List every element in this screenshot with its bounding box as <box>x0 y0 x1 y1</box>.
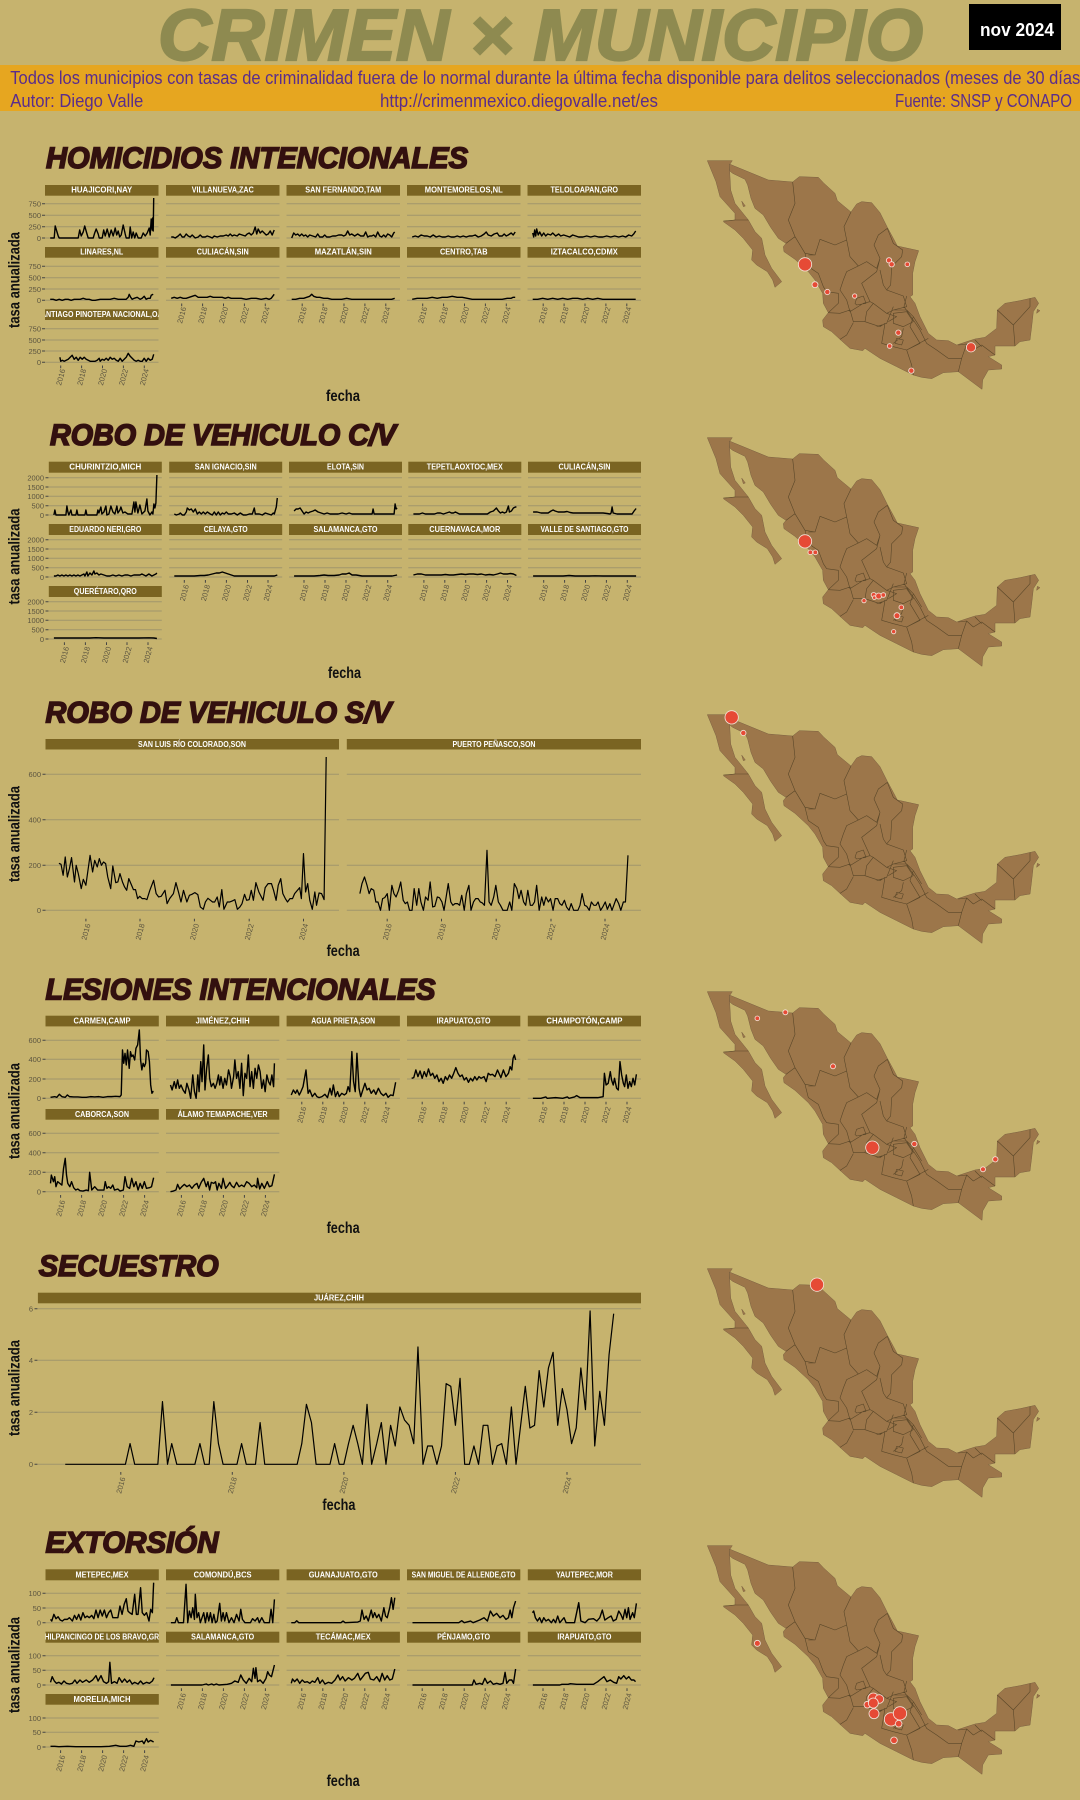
facet: Culiacán: 2018 <box>196 306 209 324</box>
facet: Comondú <box>166 1569 279 1623</box>
facet: Caborca: CABORCA,SON <box>75 1110 129 1119</box>
facet: Puerto Peñasco: PUERTO PEÑASCO,SON <box>452 740 536 749</box>
facet: Celaya <box>169 524 282 602</box>
facet: Mazatlán: 2022 <box>358 306 371 324</box>
facet: Salamanca: 2022 <box>360 584 373 602</box>
facet: San Luis Río Colorado: 200 <box>28 861 41 870</box>
subtitle band <box>0 65 1080 111</box>
facet: Valle de Santiago: 2016 <box>537 584 550 602</box>
facet: Santiago Pinotepa Nacional: 500 <box>28 336 41 345</box>
facet: Guanajuato <box>287 1569 400 1623</box>
facet: Eduardo Neri: EDUARDO NERI,GRO <box>69 525 141 534</box>
facet: Morelia: MORELIA,MICH <box>74 1695 131 1704</box>
facet: San Luis Río Colorado <box>28 739 339 941</box>
facet: Tepetlaoxtoc <box>408 462 521 515</box>
facet: Morelia: 2020 <box>96 1754 109 1773</box>
facet: Celaya: CELAYA,GTO <box>204 525 248 534</box>
facet: Irapuato <box>407 1016 520 1124</box>
x axis title: fecha <box>326 388 360 405</box>
facet: Tecámac: 2016 <box>295 1692 308 1711</box>
facet: Agua Prieta: AGUA PRIETA,SON <box>311 1016 375 1026</box>
facet: Santiago Pinotepa Nacional: 0 <box>37 358 41 367</box>
facet: Agua Prieta: 2020 <box>337 1106 350 1124</box>
facet: Teloloapan <box>528 185 641 238</box>
facet: San Luis Río Colorado: SAN LUIS RÍO COLORADO,SON <box>138 740 246 749</box>
facet: Cuernavaca: CUERNAVACA,MOR <box>429 525 501 534</box>
facet: San Luis Río Colorado: 2016 <box>79 923 92 941</box>
facet: Eduardo Neri: 0 <box>40 573 44 582</box>
facet: San Fernando <box>286 185 400 238</box>
facet: Irapuato: 2024 <box>500 1106 513 1124</box>
facet: Champotón: 2022 <box>600 1106 613 1124</box>
facet: Villanueva <box>166 185 280 238</box>
facet: San Luis Río Colorado: 2018 <box>134 923 147 941</box>
x axis title: fecha <box>327 943 360 960</box>
y axis title: tasa anualizada <box>6 1063 24 1159</box>
facet: Santiago Pinotepa Nacional: 2018 <box>75 368 88 386</box>
facet: Álamo Temapache <box>166 1109 279 1218</box>
x axis title: fecha <box>322 1497 355 1514</box>
facet: Salamanca: 2018 <box>196 1692 209 1711</box>
facet: Iztacalco: 2020 <box>579 306 592 324</box>
facet: Santiago Pinotepa Nacional: 2022 <box>117 368 130 386</box>
date badge: nov 2024 <box>980 20 1054 40</box>
facet: Irapuato: 2024 <box>621 1692 634 1711</box>
facet: Morelia: 100 <box>28 1714 41 1723</box>
facet: Puerto Peñasco: 2024 <box>599 923 612 941</box>
facet: Álamo Temapache: 2022 <box>238 1199 251 1218</box>
facet: Salamanca: 2024 <box>259 1692 272 1711</box>
facet: Irapuato: 2022 <box>600 1692 613 1711</box>
facet: Tepetlaoxtoc: TEPETLAOXTOC,MEX <box>427 463 503 472</box>
facet: Valle de Santiago: VALLE DE SANTIAGO,GTO <box>540 525 628 534</box>
facet: Centro <box>407 247 520 324</box>
facet: Salamanca: 2020 <box>340 584 353 602</box>
facet: Irapuato: 2018 <box>558 1692 571 1711</box>
facet: Agua Prieta: 2024 <box>379 1106 392 1124</box>
heading: EXTORSIÓN <box>46 1526 220 1560</box>
facet: Carmen: 200 <box>28 1075 41 1084</box>
facet: Santiago Pinotepa Nacional: 2016 <box>54 368 67 386</box>
facet: Querétaro: 2016 <box>58 646 71 664</box>
facet: Carmen: 400 <box>28 1055 41 1064</box>
facet: Culiacán: 2022 <box>238 306 251 324</box>
facet: Pénjamo: 2024 <box>500 1692 513 1711</box>
facet: Villanueva: VILLANUEVA,ZAC <box>192 186 254 195</box>
facet: Churintzio: 500 <box>31 502 44 510</box>
facet: Carmen <box>28 1016 159 1103</box>
facet: Chilpancingo de los Bravo <box>28 1632 164 1690</box>
facet: San Luis Río Colorado: 2020 <box>188 923 201 941</box>
facet: Cuernavaca: 2016 <box>417 584 430 602</box>
facet: San Luis Río Colorado: 2022 <box>243 923 256 941</box>
facet: Carmen: CARMEN,CAMP <box>74 1016 131 1026</box>
facet: Salamanca: 2018 <box>319 584 332 602</box>
facet: Irapuato: 2022 <box>479 1106 492 1124</box>
facet: Linares: 750 <box>28 262 41 271</box>
facet: Culiacán: 2016 <box>175 306 188 324</box>
facet: Salamanca: 2016 <box>175 1692 188 1711</box>
facet: Tecámac: 2020 <box>337 1692 350 1711</box>
facet: Culiacán <box>528 462 641 515</box>
facet: Irapuato: 2020 <box>579 1692 592 1711</box>
facet: Santiago Pinotepa Nacional <box>28 309 168 386</box>
facet: Eduardo Neri: 2000 <box>27 536 44 544</box>
facet: Carmen: 0 <box>37 1094 41 1103</box>
heading: ROBO DE VEHICULO C/V <box>50 419 399 452</box>
facet: Juárez: 2020 <box>337 1476 350 1495</box>
facet: Caborca <box>28 1109 159 1218</box>
facet: Valle de Santiago <box>528 524 641 602</box>
facet: Yautepec <box>528 1569 641 1623</box>
facet: Cuernavaca <box>408 524 521 602</box>
facet: Querétaro: 0 <box>40 635 44 644</box>
facet: San Ignacio <box>169 462 282 515</box>
facet: Eduardo Neri: 500 <box>31 564 44 572</box>
facet: Centro: 2022 <box>479 306 492 324</box>
facet: Huajicori: 500 <box>28 211 41 220</box>
facet: Morelia <box>28 1694 159 1773</box>
facet: Puerto Peñasco: 2018 <box>435 923 448 941</box>
panel: homicidios intencionales <box>6 142 641 405</box>
facet: Elota <box>289 462 402 515</box>
facet: Querétaro: 500 <box>31 626 44 634</box>
panel: robo de vehiculo con violencia <box>6 419 641 682</box>
facet: Churintzio: 1500 <box>27 483 44 492</box>
facet: Querétaro: 1500 <box>27 607 44 616</box>
x axis title: fecha <box>328 665 361 682</box>
facet: Iztacalco: 2018 <box>558 306 571 324</box>
facet: Álamo Temapache: ÁLAMO TEMAPACHE,VER <box>178 1110 268 1119</box>
facet: Culiacán: 2020 <box>217 306 230 324</box>
facet: Morelia: 2016 <box>54 1754 67 1773</box>
facet: Juárez: 2024 <box>561 1476 574 1495</box>
heading: SECUESTRO <box>39 1250 219 1283</box>
facet: Montemorelos <box>407 185 520 238</box>
facet: Eduardo Neri: 1000 <box>27 554 44 563</box>
facet: Juárez: 4 <box>29 1356 33 1365</box>
facet: Metepec: 0 <box>37 1618 41 1628</box>
facet: Culiacán: CULIACÁN,SIN <box>558 463 611 472</box>
facet: Juárez: 2018 <box>226 1476 239 1495</box>
facet: Metepec: 100 <box>28 1589 41 1598</box>
facet: Champotón: 2016 <box>537 1106 550 1124</box>
facet: Celaya: 2020 <box>220 584 233 602</box>
facet: Iztacalco: 2024 <box>620 306 633 324</box>
facet: Agua Prieta <box>287 1016 400 1124</box>
facet: Salamanca: 2016 <box>298 584 311 602</box>
x axis title: fecha <box>327 1220 360 1237</box>
facet: Querétaro: 2020 <box>100 646 113 664</box>
facet: Puerto Peñasco: 2020 <box>490 923 503 941</box>
facet: Irapuato: 2016 <box>537 1692 550 1711</box>
map: lesiones <box>707 992 1040 1220</box>
facet: Chilpancingo de los Bravo: 100 <box>28 1652 41 1660</box>
facet: Salamanca: 2022 <box>238 1692 251 1711</box>
facet: Centro: 2018 <box>437 306 450 324</box>
facet: Mazatlán: 2024 <box>379 306 392 324</box>
panel: secuestro <box>6 1250 641 1514</box>
facet: Santiago Pinotepa Nacional: 2020 <box>96 368 109 386</box>
facet: Yautepec: YAUTEPEC,MOR <box>556 1570 613 1579</box>
panel: extorsión <box>6 1526 641 1790</box>
y axis title: tasa anualizada <box>6 508 24 604</box>
facet: Irapuato: IRAPUATO,GTO <box>557 1633 611 1642</box>
facet: Champotón: 2018 <box>558 1106 571 1124</box>
facet: Valle de Santiago: 2022 <box>600 584 613 602</box>
facet: Churintzio: 2000 <box>27 474 44 482</box>
facet: Juárez <box>29 1293 641 1495</box>
facet: Celaya: 2024 <box>262 584 275 602</box>
facet: Champotón <box>528 1016 641 1124</box>
subtitle band: http://crimenmexico.diegovalle.net/es <box>380 91 658 111</box>
facet: Mazatlán <box>286 247 400 324</box>
date badge <box>969 4 1061 50</box>
facet: Juárez: 2016 <box>114 1476 127 1495</box>
facet: Puerto Peñasco <box>347 739 641 941</box>
facet: Mazatlán: 2018 <box>317 306 330 324</box>
facet: Churintzio: 1000 <box>27 492 44 501</box>
facet: Morelia: 2022 <box>117 1754 130 1773</box>
facet: Irapuato: 2016 <box>416 1106 429 1124</box>
facet: Culiacán: CULIACÁN,SIN <box>197 248 249 257</box>
facet: Salamanca: 2024 <box>381 584 394 602</box>
facet: Elota: ELOTA,SIN <box>327 463 364 472</box>
facet: Caborca: 2020 <box>96 1199 109 1218</box>
facet: Guanajuato: GUANAJUATO,GTO <box>309 1570 378 1579</box>
facet: Iztacalco <box>528 247 641 324</box>
facet: Metepec: 50 <box>33 1604 41 1613</box>
facet: Montemorelos: MONTEMORELOS,NL <box>425 186 503 195</box>
facet: Puerto Peñasco: 2022 <box>545 923 558 941</box>
facet: Jiménez <box>166 1016 279 1098</box>
facet: Centro: 2024 <box>500 306 513 324</box>
facet: Caborca: 600 <box>28 1129 41 1138</box>
facet: Salamanca: SALAMANCA,GTO <box>314 525 378 534</box>
facet: Linares: 0 <box>37 296 41 305</box>
facet: Teloloapan: TELOLOAPAN,GRO <box>550 186 618 195</box>
facet: Comondú: COMONDÚ,BCS <box>194 1570 252 1579</box>
facet: Santiago Pinotepa Nacional: 2024 <box>138 368 151 386</box>
facet: Linares: 250 <box>28 285 41 294</box>
facet: Centro: CENTRO,TAB <box>440 248 488 257</box>
facet: Mazatlán: MAZATLÁN,SIN <box>315 248 372 257</box>
facet: Querétaro: 2018 <box>79 646 92 664</box>
facet: Celaya: 2018 <box>199 584 212 602</box>
facet: Tecámac: TECÁMAC,MEX <box>316 1633 371 1642</box>
facet: Agua Prieta: 2022 <box>358 1106 371 1124</box>
facet: San Luis Río Colorado: 400 <box>28 816 41 824</box>
facet: Santiago Pinotepa Nacional: SANTIAGO PINOTEPA NACIONAL,OAX <box>36 310 168 319</box>
map: extorsión <box>707 1546 1040 1774</box>
facet: San Miguel de Allende: SAN MIGUEL DE ALLENDE,GTO <box>412 1570 516 1579</box>
facet: San Luis Río Colorado: 2024 <box>297 923 310 941</box>
facet: San Luis Río Colorado: 600 <box>28 770 41 779</box>
facet: Puerto Peñasco: 2016 <box>381 923 394 941</box>
facet: Cuernavaca: 2022 <box>480 584 493 602</box>
facet: San Luis Río Colorado: 0 <box>37 906 41 915</box>
facet: Centro: 2020 <box>458 306 471 324</box>
map: robo de vehiculo con violencia <box>707 438 1040 666</box>
facet: Álamo Temapache: 2020 <box>217 1199 230 1218</box>
facet: Álamo Temapache: 2024 <box>259 1199 272 1218</box>
facet: Carmen: 600 <box>28 1036 41 1045</box>
facet: Pénjamo: 2016 <box>416 1692 429 1711</box>
facet: Churintzio: 0 <box>40 511 44 520</box>
facet: Salamanca: SALAMANCA,GTO <box>191 1633 254 1642</box>
facet: Huajicori: 0 <box>37 234 41 243</box>
facet: San Miguel de Allende <box>407 1569 520 1623</box>
facet: Centro: 2016 <box>416 306 429 324</box>
map: robo de vehiculo sin violencia <box>707 711 1040 943</box>
facet: Cuernavaca: 2018 <box>438 584 451 602</box>
facet: Morelia: 2024 <box>138 1754 151 1773</box>
facet: Valle de Santiago: 2024 <box>621 584 634 602</box>
facet: Iztacalco: 2016 <box>537 306 550 324</box>
facet: Caborca: 2016 <box>54 1199 67 1218</box>
facet: Champotón: CHAMPOTÓN,CAMP <box>546 1016 623 1026</box>
facet: Champotón: 2020 <box>579 1106 592 1124</box>
facet: Culiacán: 2024 <box>259 306 272 324</box>
facet: Mazatlán: 2020 <box>338 306 351 324</box>
facet: Mazatlán: 2016 <box>296 306 309 324</box>
facet: Querétaro: 1000 <box>27 616 44 625</box>
facet: Huajicori: 250 <box>28 222 41 232</box>
facet: Juárez: 6 <box>29 1304 33 1314</box>
facet: Querétaro: QUERÉTARO,QRO <box>74 587 137 596</box>
heading: LESIONES INTENCIONALES <box>46 973 436 1006</box>
facet: Pénjamo: PÉNJAMO,GTO <box>437 1633 490 1642</box>
map: homicidios <box>707 161 1040 389</box>
heading: HOMICIDIOS INTENCIONALES <box>46 142 468 175</box>
facet: Huajicori <box>28 185 158 243</box>
facet: Huajicori: HUAJICORI,NAY <box>71 186 133 195</box>
facet: Querétaro <box>27 586 162 664</box>
facet: San Ignacio: SAN IGNACIO,SIN <box>195 463 257 472</box>
facet: Metepec <box>28 1569 159 1628</box>
facet: Irapuato: 2018 <box>437 1106 450 1124</box>
facet: Caborca: 2022 <box>117 1199 130 1218</box>
facet: San Fernando: SAN FERNANDO,TAM <box>305 186 382 195</box>
x axis title: fecha <box>327 1773 360 1790</box>
facet: Querétaro: 2000 <box>27 598 44 606</box>
facet: Agua Prieta: 2018 <box>316 1106 329 1124</box>
facet: Iztacalco: 2022 <box>599 306 612 324</box>
panel: lesiones intencionales <box>6 973 641 1237</box>
facet: Eduardo Neri <box>27 524 162 582</box>
facet: Cuernavaca: 2020 <box>459 584 472 602</box>
facet: Caborca: 200 <box>28 1168 41 1177</box>
facet: Eduardo Neri: 1500 <box>27 545 44 554</box>
facet: Juárez: 0 <box>29 1460 33 1469</box>
y axis title: tasa anualizada <box>6 786 24 882</box>
facet: Caborca: 0 <box>37 1188 41 1196</box>
facet: Tecámac: 2022 <box>358 1692 371 1711</box>
facet: Álamo Temapache: 2016 <box>175 1199 188 1218</box>
facet: Santiago Pinotepa Nacional: 250 <box>28 347 41 356</box>
facet: Chilpancingo de los Bravo: 50 <box>33 1666 41 1675</box>
facet: Celaya: 2016 <box>178 584 191 602</box>
y axis title: tasa anualizada <box>6 232 24 328</box>
facet: Caborca: 400 <box>28 1148 41 1158</box>
facet: Pénjamo: 2022 <box>479 1692 492 1711</box>
y axis title: tasa anualizada <box>6 1340 24 1436</box>
facet: Chilpancingo de los Bravo: CHILPANCINGO DE LOS BRAVO,GRO <box>40 1633 164 1642</box>
facet: Juárez: JUÁREZ,CHIH <box>314 1294 364 1303</box>
facet: Cuernavaca: 2024 <box>501 584 514 602</box>
facet: Tecámac: 2024 <box>379 1692 392 1711</box>
facet: Juárez: 2022 <box>449 1476 462 1495</box>
facet: Tecámac <box>287 1632 400 1711</box>
facet: Pénjamo <box>407 1632 520 1711</box>
facet: Irapuato <box>528 1632 641 1711</box>
heading: ROBO DE VEHICULO S/V <box>46 696 394 729</box>
facet: Morelia: 50 <box>33 1728 41 1737</box>
facet: Linares <box>28 247 158 305</box>
facet: Morelia: 2018 <box>75 1754 88 1773</box>
subtitle band: Autor: Diego Valle <box>10 91 143 111</box>
facet: Tecámac: 2018 <box>316 1692 329 1711</box>
facet: Valle de Santiago: 2018 <box>558 584 571 602</box>
facet: Querétaro: 2022 <box>121 646 134 664</box>
facet: Juárez: 2 <box>29 1408 33 1417</box>
facet: Huajicori: 750 <box>28 200 41 208</box>
facet: Linares: LINARES,NL <box>80 248 123 257</box>
facet: Salamanca <box>166 1632 279 1711</box>
facet: Valle de Santiago: 2020 <box>579 584 592 602</box>
facet: Salamanca <box>289 524 402 602</box>
facet: Jiménez: JIMÉNEZ,CHIH <box>196 1016 250 1026</box>
facet: Churintzio <box>27 462 162 520</box>
facet: Álamo Temapache: 2018 <box>196 1199 209 1218</box>
facet: Linares: 500 <box>28 274 41 282</box>
facet: Metepec: METEPEC,MEX <box>76 1570 129 1579</box>
facet: Pénjamo: 2018 <box>437 1692 450 1711</box>
y axis title: tasa anualizada <box>6 1617 24 1713</box>
facet: Querétaro: 2024 <box>142 646 155 664</box>
facet: Santiago Pinotepa Nacional: 750 <box>28 324 41 334</box>
facet: Caborca: 2024 <box>138 1199 151 1218</box>
facet: Iztacalco: IZTACALCO,CDMX <box>551 248 618 257</box>
facet: Champotón: 2024 <box>621 1106 634 1124</box>
facet: Culiacán <box>166 247 280 324</box>
facet: Irapuato: 2020 <box>458 1106 471 1124</box>
facet: Celaya: 2022 <box>241 584 254 602</box>
facet: Pénjamo: 2020 <box>458 1692 471 1711</box>
facet: Chilpancingo de los Bravo: 0 <box>37 1681 41 1690</box>
facet: Caborca: 2018 <box>75 1199 88 1218</box>
facet: Salamanca: 2020 <box>217 1692 230 1711</box>
facet: Irapuato: IRAPUATO,GTO <box>437 1016 491 1026</box>
facet: Morelia: 0 <box>37 1743 41 1752</box>
map: secuestro <box>707 1269 1040 1497</box>
facet: Agua Prieta: 2016 <box>295 1106 308 1124</box>
facet: Churintzio: CHURINTZIO,MICH <box>69 463 142 472</box>
panel: robo de vehiculo sin violencia <box>6 696 641 960</box>
